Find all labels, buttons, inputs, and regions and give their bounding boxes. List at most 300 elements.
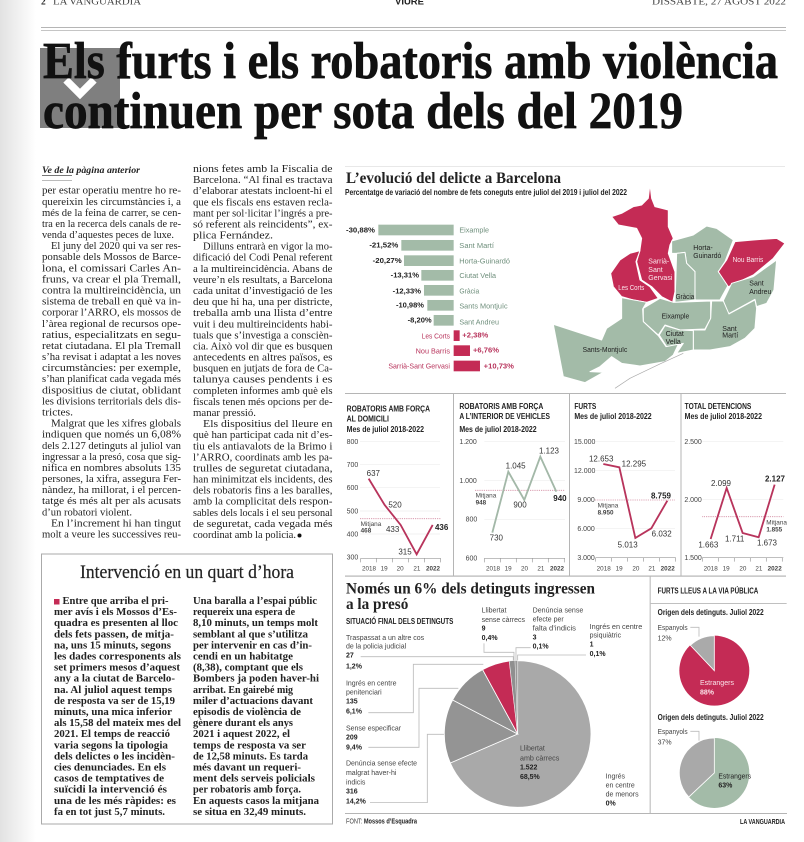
source and footer: FONT: Mossos d’Esquadra [346,818,417,826]
article continuation label: Ve de la pàgina anterior [42,166,140,176]
line chart: total detencions: Mitjana [766,520,787,527]
line chart: total detencions [684,402,787,573]
map district labels: Sants-Montjuïc [583,347,628,354]
line chart: furts: FURTS [574,402,597,411]
article text column 2: treballa amb una llista d’entre [193,308,333,319]
article text column 2: veure’n els resultats, a Barcelona [193,275,333,286]
article text column 1: d’un robatori violent. [42,507,132,518]
pie labels: 9 [482,626,486,633]
article text column 2: l’ARRO, coordinats amb les pa- [193,452,333,463]
bar chart: variation by district: -8,20% [408,318,433,325]
line chart: robatoris amb força a l'interior de vehicles: Mes de juliol 2018-2022 [459,425,537,434]
pie labels: indicis [346,779,366,786]
article text column 1: circumstàncies: per exemple, [42,363,181,374]
line chart: total detencions: 2018 [704,566,718,573]
article text column 1: sistema de treball en què va in- [42,297,182,308]
bar chart: variation by district: +10,73% [484,363,515,370]
panel: Intervenció en un quart d'hora [42,554,332,824]
source and footer: LA VANGUARDIA [740,819,785,826]
map district labels: Sant [648,267,663,274]
box text column 1: una de les més ràpides: es [54,796,176,807]
line chart: robatoris amb força a l'interior de vehicles: 19 [505,566,512,573]
panel: Només un 6% dels detinguts ingressen a la presó [346,580,642,808]
line chart: robatoris amb força a l'interior de vehicles: 1.045 [506,462,526,471]
line chart: total detencions: 1.855 [766,527,783,534]
icon: section chevron square [40,48,120,128]
panel: Furts lleus a la via pública: FURTS LLEUS A LA VIA PÚBLICA [658,587,758,596]
article text column 2: vuit i deu multireincidents habi- [193,319,333,330]
article text column 2: han minimitzat els incidents, des [193,474,332,486]
article text column 1: persones, la xifra, assegura Fer- [42,474,182,485]
article text column 1: molt a veure les successives reu- [42,530,182,540]
box text column 2: requereix una espera de [193,607,295,618]
map district labels: Andreu [749,289,771,296]
line chart: furts: 19 [616,566,623,573]
line chart: total detencions: 1.711 [725,535,745,544]
box text column 1: fa en tot just 5,7 minuts. [54,807,165,818]
article text column 1: nifica en nombres absoluts 135 [42,463,181,474]
bar chart: variation by district: -10,98% [396,303,425,310]
box text column 2: per robatoris amb força. [193,785,301,796]
line chart: robatoris amb força al domicili: Mes de juliol 2018-2022 [347,425,424,434]
article text column 2 [193,164,333,541]
article text column 1: per estar operatiu mentre ho re- [42,186,182,197]
heading: a la presó [346,596,408,613]
box text column 2: 2021 i aquest 2022, el [193,729,290,740]
pie chart: origin, green: 63% [718,783,733,790]
bar chart: variation by district [346,225,515,371]
heading: Només un 6% dels detinguts ingressen [346,580,595,597]
line chart: robatoris amb força al domicili: 2022 [426,566,441,573]
article text column 1: fruns, va crear el pla Tremall, [42,274,181,285]
line chart: furts: Mitjana [598,503,619,510]
line chart: robatoris amb força al domicili: 600 [347,485,358,492]
article text column 1: tra en la recerca dels canals de re- [42,219,181,230]
line chart: furts: 15.000 [574,439,595,446]
pie labels: de la policia judicial [346,644,407,651]
bar chart: variation by district: +6,76% [473,348,500,355]
article text column 2: busquen en jutjats de fora de Ca- [193,364,333,375]
line chart: robatoris amb força al domicili: 520 [388,500,402,509]
box text column 2: cendi en un habitatge [193,652,293,662]
article text column 2: sables dels locals i el seu personal [193,508,333,519]
line chart: robatoris amb força al domicili: 2018 [362,566,377,573]
line chart: furts: 8.950 [598,510,614,517]
line chart: furts: 6.032 [652,530,672,539]
article text column 2: Barcelona. “Al final es tractava [193,175,333,186]
article text column 2: dels robatoris fins a les baralles, [193,486,332,497]
line chart: furts: 12.000 [574,468,595,475]
line chart: total detencions: 2022 [768,566,782,573]
line chart: robatoris amb força a l'interior de vehicles: 2018 [486,566,501,573]
box text column 1: na. Al juliol aquest temps [54,685,172,696]
heading [346,580,595,626]
line chart: robatoris amb força al domicili: 800 [347,439,358,446]
pie labels: 0% [606,801,617,808]
bar chart: variation by district: Nou Barris [416,346,450,355]
rules between chart panels [345,166,786,577]
article text column 2: plica Fernández. [193,230,273,242]
article text column 1: venda d’aquestes peces de luxe. [42,230,174,241]
line chart: robatoris amb força al domicili: 700 [347,462,358,469]
line chart: robatoris amb força al domicili: 300 [347,555,358,562]
pie labels: Denúncia sense [533,607,583,614]
pie labels: 0,1% [533,643,549,650]
line chart: robatoris amb força al domicili: 436 [435,523,449,532]
line chart: furts: Mes de juliol 2018-2022 [574,412,652,421]
article text column 1: lona, el comissari Carles An- [42,263,182,274]
map district labels: Martí [722,333,738,340]
line chart: robatoris amb força a l'interior de vehicles: 800 [466,517,477,524]
box text column 1: als 15,58 del mateix mes del [54,718,181,729]
map district labels: Horta- [693,245,713,252]
line chart: robatoris amb força a l'interior de vehicles: ROBATORIS AMB FORÇA [459,402,544,411]
article text column 2: deu que hi ha, una per districte, [193,297,332,308]
article text column 2: antecedents en altres països, es [193,352,332,364]
line chart: total detencions: 2.127 [765,475,786,484]
box text column 1: varia segons la tipologia [54,740,169,751]
box text column 1: minuts, una mica inferior [54,707,172,718]
line chart: robatoris amb força a l'interior de vehicles: 21 [537,566,545,573]
line chart: robatoris amb força al domicili: 637 [367,469,381,478]
heading: SITUACIÓ FINAL DELS DETINGUTS [346,617,454,626]
line chart: robatoris amb força al domicili: 19 [381,566,388,573]
map district labels: Les Corts [618,285,645,292]
pie labels: 0,1% [590,651,606,658]
pie labels: 1 [590,642,594,649]
pie labels [346,607,642,808]
bar chart: variation by district: Les Corts [422,331,450,340]
article text column 2: què han participat cada nit d’es- [193,430,333,441]
line chart: furts: 2022 [661,566,675,573]
box text column 2: ment dels serveis policials [193,774,315,785]
line chart: robatoris amb força al domicili: 400 [347,531,358,538]
box text column 1 [54,596,181,818]
bar chart: variation by district: Sants Montjuïc [459,301,508,310]
line chart: robatoris amb força a l'interior de vehicles: 20 [521,566,529,573]
box text column 1: dels delictes o les incidèn- [54,751,176,762]
box text column 2: gènere durant els anys [193,718,293,729]
box text column 1: any a la ciutat de Barcelo- [54,674,176,685]
article text column 2: tiu els antiavalots de la Brimo i [193,441,333,452]
box text column 1: quadra es presenten al lloc [54,618,178,629]
pie chart: origin, green: 37% [658,740,672,747]
pie labels: 135 [346,699,358,706]
box text column 2: 8,10 minuts, un temps molt [193,618,319,629]
map section heading: L’evolució del delicte a Barcelona [346,170,561,187]
line chart: furts: 2018 [597,566,611,573]
line chart: furts: 8.759 [651,492,672,501]
article text column 2: amb la complicitat dels respon- [193,497,333,508]
pie chart: origin, green [658,713,764,808]
article text column 1: retat ciutadana. El pla Tremall [42,341,181,352]
map: Barcelona districts [553,184,785,388]
line chart: furts: 5.013 [618,541,638,550]
pie labels: efecte per [533,616,564,623]
page header [41,0,786,31]
article text column 2: completen informes amb què els [193,386,332,397]
article text column 2: de seguretat, cada vegada més [193,519,332,530]
pie labels: 68,5% [520,774,541,781]
map district labels: Sarrià- [648,259,670,266]
box text column 2: de 12,58 minuts. Es tarda [193,751,309,762]
line chart: furts: 12.653 [589,454,614,463]
bar chart: variation by district: -21,52% [369,243,399,250]
pie labels: 9,4% [346,744,363,751]
article text column 1: s’han planificat cada vegada més [42,374,181,385]
article text column 2: nions fetes amb la Fiscalia de [193,164,333,175]
line chart: total detencions: Mes de juliol 2018-2022 [685,412,762,421]
pie chart: origin, red: 12% [658,636,672,643]
article text column 2: Dilluns entrarà en vigor la mo- [203,242,333,253]
pie labels: Llibertat [520,746,545,753]
box text column 2: Una baralla a l’espai públic [193,596,317,607]
box text column 2: per intervenir en cas d’in- [193,640,313,651]
box text column 2 [193,596,320,818]
line chart: robatoris amb força a l'interior de vehicles: 1.200 [459,439,477,446]
box text column 1: Entre que arriba el pri- [62,596,169,607]
article text column 2: manar pressió. [193,408,256,419]
box text column 2: (8,38), comptant que els [193,663,303,674]
box text column 1: na, uns 15 minuts, segons [54,640,171,651]
article text column 1: En l’increment hi han tingut [51,518,181,529]
bar chart: variation by district: Eixample [459,226,489,235]
bar chart: variation by district: Sarrià-Sant Gervasi [388,361,450,370]
bar chart: variation by district: -13,31% [391,273,420,280]
line chart: robatoris amb força a l'interior de vehicles: 730 [490,534,504,543]
line chart: robatoris amb força a l'interior de vehicles: 1.123 [539,447,560,456]
box text column 1: set primers mesos d’aquest [54,663,181,674]
bar chart: variation by district: -20,27% [373,258,403,265]
pie labels: 6,1% [346,709,363,716]
line chart: total detencions: 2.500 [684,439,702,446]
line chart: total detencions: 21 [755,566,763,573]
map district labels: Eixample [662,314,689,321]
line chart: total detencions: 2.000 [684,497,702,504]
bar chart: variation by district: Horta-Guinardó [459,256,510,265]
article text column 1: contra la multireincidència, un [42,286,182,296]
line chart: robatoris amb força a l'interior de vehicles: 940 [553,494,567,503]
article text column 1: dels 2.127 detinguts al juliol van [42,441,182,452]
article text column 1: trictes. [42,408,73,418]
article text column 2: cia. Això vol dir que es busquen [193,341,333,352]
pie labels: Llibertat [482,607,507,614]
box text column 2: temps de resposta va ser [193,740,306,751]
bar chart: variation by district: +2,38% [462,333,489,340]
box text column 2: arribat. En gairebé mig [193,685,294,696]
pie labels: penitenciari [346,689,382,696]
line chart: total detencions: TOTAL DETENCIONS [685,402,752,411]
pie labels: Ingrés en centre [346,681,397,688]
panel: Furts lleus a la via pública [650,576,787,813]
map district labels: Sant [749,281,764,288]
line chart: robatoris amb força a l'interior de vehicles: 1.000 [459,478,477,485]
line chart: furts: 6.000 [577,526,595,533]
article text column 2: dificació del Codi Penal referent [193,253,333,264]
pie labels: en centre [606,783,635,790]
line chart: robatoris amb força al domicili: 500 [347,508,358,515]
pie chart: origin, green: Espanyols [658,729,688,736]
pie labels: amb càrrecs [520,755,560,762]
box text column 2: En aquests casos la mitjana [193,796,320,807]
box heading: Intervenció en un quart d’hora [80,562,295,583]
pie labels: 1,2% [346,663,363,670]
line chart: total detencions: 1.500 [684,555,702,562]
box text column 1: 2021. El temps de reacció [54,729,170,740]
title: continuen per sota dels del 2019 [43,83,683,140]
pie chart: final situation [444,661,591,807]
article text column 2: cada unitat d’investigació de les [193,286,332,297]
article text column 1: El juny del 2020 qui va ser res- [51,241,181,252]
map district labels: Ciutat [666,331,684,338]
line chart: furts: 21 [648,566,656,573]
article text column 2: trulles de seguretat ciutadana, [193,463,332,474]
box text column 1: cies denunciades. En els [54,762,166,774]
line chart: furts: 3.000 [577,555,595,562]
article text column 2: mant per sol·licitar l’ingrés a pre- [193,208,333,219]
line chart: robatoris amb força al domicili: 21 [413,566,421,573]
line chart: furts: 20 [632,566,640,573]
pie labels: 1.522 [520,765,538,772]
map section heading: Percentatge de variació del nombre de fets coneguts entre juliol del 2019 i juliol del 2022 [345,187,627,197]
pie labels: 0,4% [482,635,498,642]
line chart: robatoris amb força al domicili: 433 [386,525,400,534]
pie labels: Sense especificar [346,725,402,732]
box text column 2: semblant al que s’utilitza [193,629,309,640]
line chart: robatoris amb força al domicili: 315 [398,548,412,557]
map district labels: Guinardó [693,253,721,260]
article text column 2: d’elaborar atestats incloent-hi el [193,186,333,197]
line chart: robatoris amb força al domicili: Mitjana [361,521,382,528]
article text column 1: ratius, especialitzats en segu- [42,330,182,341]
pie labels: falta d’indicis [533,626,577,633]
pie labels: psiquiàtric [590,633,622,640]
article text column 1: Malgrat que les xifres globals [51,419,181,430]
pie labels: Ingrés [606,773,626,780]
article text column 2: coordinat amb la policia. [193,530,296,541]
title [43,33,778,140]
article text column 1: ingressar a la presó, cosa que sig- [42,452,181,463]
article text column 2: só referent als reincidents”, ex- [193,220,333,230]
line chart: robatoris amb força al domicili: 468 [361,528,372,535]
pie labels: 27 [346,653,354,660]
map district labels: Nou Barris [733,257,764,264]
box text column 1: casos de temptatives de [54,774,164,785]
line chart: total detencions: 19 [723,566,730,573]
line chart: robatoris amb força al domicili: 20 [397,566,404,573]
bar chart: variation by district: Ciutat Vella [459,271,497,280]
map district labels [583,245,771,354]
map district labels: Gràcia [676,294,694,301]
line chart: total detencions: 1.663 [698,541,719,550]
article text column 1: ponsable dels Mossos de Barce- [42,252,182,263]
line chart: robatoris amb força a l'interior de vehicles: A L’INTERIOR DE VEHICLES [459,412,551,421]
line chart: robatoris amb força a l'interior de vehicles: 2022 [550,566,565,573]
article text column 1: més de la feina de carrer, se cen- [42,208,181,219]
article continuation label [42,166,140,181]
pie labels: Denúncia sense efecte [346,761,417,768]
line chart: total detencions: 20 [739,566,747,573]
line chart: robatoris amb força al domicili [347,405,449,573]
pie chart: origin, red: Origen dels detinguts. Juliol 2022 [658,608,764,617]
map district labels: Vella [666,339,681,346]
line chart: robatoris amb força a l'interior de vehicles: 948 [476,499,487,506]
box text column 2: miler d’actuacions davant [193,696,314,707]
article text column 1: les divisions territorials dels dis- [42,396,181,407]
bar chart: variation by district: Sant Andreu [459,317,499,326]
line chart: total detencions: 1.673 [757,539,778,548]
article text column 2: talunya causes pendents i es [193,375,332,386]
article text column 2: fiscals tenen més opcions per de- [193,397,333,408]
map district labels: Sant [722,326,737,333]
box text column 1: les dades corresponents als [54,652,181,662]
article text column 1: nàndez, ha millorat, i el percen- [42,485,182,496]
box text column 2: se situa en 32,49 minuts. [193,807,306,818]
box text column 2: més davant un requeri- [193,762,302,774]
article text column 1: indiquen que només un 6,08% [42,430,181,441]
article text column 2: a la multireincidència. Abans de [193,264,333,275]
line chart: furts [574,402,676,573]
pie chart: origin, red: 88% [700,690,715,697]
box text column 1: suïcidi la intervenció és [54,785,167,796]
pie labels: 316 [346,788,358,795]
pie labels: Traspassat a un altre cos [346,635,425,642]
article text column 1: l’àrea regional de recursos ope- [42,319,182,330]
line chart: robatoris amb força a l'interior de vehicles: Mitjana [476,493,497,500]
line chart: robatoris amb força a l'interior de vehicles [459,402,567,573]
pie labels: 3 [533,635,537,642]
source and footer [345,813,787,826]
box text column 1: de resposta va ser de 15,19 [54,696,175,707]
article text column 2: tuals que s’investiga a conscièn- [193,330,333,341]
pie labels: Ingrés en centre [590,624,642,631]
pie labels: de menors [606,792,639,799]
article text column 1 [42,186,182,540]
pie labels: 209 [346,734,358,741]
pie chart: origin, red: Estrangers [700,680,734,687]
box text column 2: episodis de violència de [193,707,301,718]
bar chart: variation by district: -30,88% [346,227,376,234]
map district labels: Gervasi [648,275,673,282]
pie chart: origin, red [658,608,764,706]
article text column 1: corporar l’ARRO, els mossos de [42,308,181,319]
pie labels: sense càrrecs [482,617,525,624]
article text column 2: que els fiscals ens estaven recla- [193,197,333,208]
pie labels: 14,2% [346,798,367,805]
article text column 1: s’ha revisat i adaptat a les noves [42,352,181,363]
line chart: total detencions: 2.099 [711,479,732,488]
bar chart: variation by district: Gràcia [459,286,480,295]
article text column 2: Els dispositius del lleure en [203,419,333,430]
bar chart: variation by district: Sant Martí [459,241,494,250]
pie labels: malgrat haver-hi [346,770,397,777]
pie chart: origin, green: Origen dels detinguts. Juliol 2022 [658,713,764,722]
line chart: furts: 12.295 [622,460,647,469]
box text column 2: Bombers ja poden haver-hi [193,674,319,685]
box text column 1: dels fets passen, de mitja- [54,629,175,640]
line chart: robatoris amb força al domicili: AL DOMICILI [347,415,389,424]
box text column 1: mer avís i els Mossos d’Es- [54,607,178,618]
map section heading [345,170,627,197]
article text column 1: tatge és més alt per als acusats [42,496,181,507]
line chart: robatoris amb força al domicili: ROBATORIS AMB FORÇA [347,405,430,414]
pie chart: origin, red: Espanyols [658,625,688,632]
line chart: robatoris amb força a l'interior de vehicles: 900 [513,500,527,509]
line chart: robatoris amb força a l'interior de vehicles: 600 [466,556,477,563]
bar chart: variation by district: -12,33% [393,288,422,295]
pie chart: origin, green: Estrangers [718,773,751,780]
article text column 1: dispositius de ciutat, oblidant [42,385,181,396]
